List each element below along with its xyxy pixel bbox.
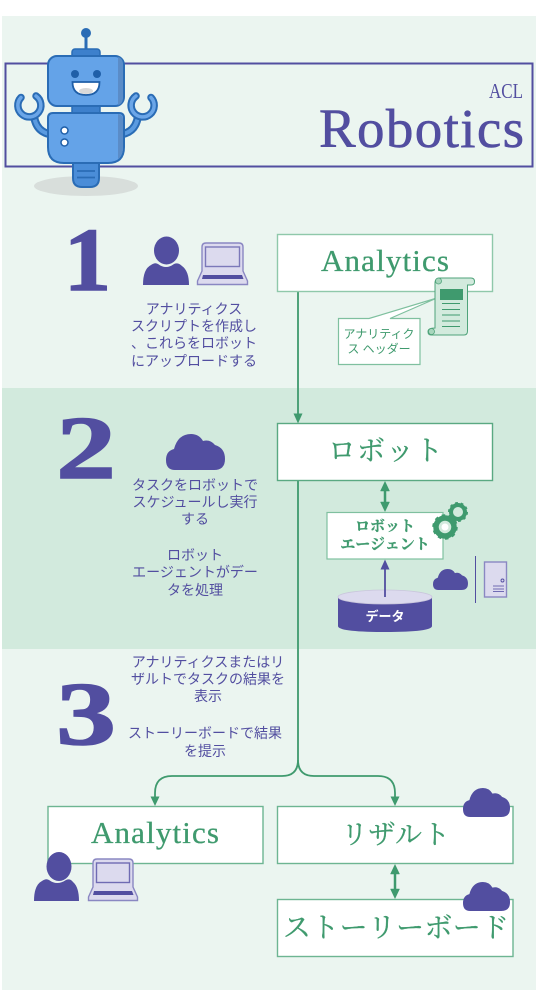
- text: step 1 description: にアップロードする: [131, 353, 257, 369]
- text: step 3 description: ストーリーボードで結果: [128, 725, 282, 741]
- numeral 3: 3: [56, 664, 116, 764]
- icon: robot: [18, 28, 154, 196]
- box: Analytics (step 3): Analytics: [91, 815, 219, 850]
- numeral 2: 2: [56, 398, 116, 498]
- text: step 1 description: [131, 301, 257, 369]
- database: データ: データ: [365, 609, 405, 624]
- text: step 2 description: エージェントがデー: [132, 564, 258, 580]
- text: step 3 description: [128, 654, 285, 759]
- text: step 3 description: を提示: [184, 743, 226, 759]
- callout: analytics header: ス ヘッダー: [347, 341, 411, 356]
- text: step 1 description: スクリプトを作成し: [131, 318, 257, 334]
- box: ロボット: ロボット: [328, 436, 444, 467]
- title: ACL: ACL: [489, 79, 523, 103]
- box: ロボット エージェント: エージェント: [340, 536, 430, 553]
- icon: person (step 3): [34, 852, 79, 901]
- icon: scroll: [428, 278, 474, 335]
- text: step 2 description: する: [181, 511, 209, 527]
- arms: [34, 116, 138, 134]
- text: step 3 description: アナリティクスまたはリ: [132, 654, 284, 670]
- icon: gears: [434, 504, 466, 538]
- connector: analytics to robot: [294, 291, 302, 424]
- numeral 1: 1: [64, 210, 111, 310]
- box: リザルト: [278, 806, 513, 864]
- text: step 2 description: タを処理: [167, 582, 223, 598]
- text: step 3 description: ザルトでタスクの結果を: [131, 671, 285, 687]
- box: Analytics (step 1): [278, 234, 492, 292]
- text: step 1 description: 、これらをロボット: [131, 335, 257, 351]
- icon: cloud (data): [433, 569, 468, 590]
- callout: analytics header: [338, 298, 437, 364]
- icon: person (step 1): [143, 236, 189, 285]
- box: ロボット: [278, 424, 492, 480]
- text: step 3 description: 表示: [194, 688, 222, 704]
- text: step 2 description: [132, 477, 258, 598]
- text: step 2 description: タスクをロボットで: [132, 477, 258, 493]
- box: リザルト: リザルト: [341, 820, 451, 850]
- database: データ: [338, 590, 432, 632]
- header frame: [6, 64, 532, 166]
- head: [48, 56, 124, 106]
- box: ロボット エージェント: [327, 512, 443, 559]
- text: step 2 description: スケジュールし実行: [132, 494, 258, 510]
- icon: cloud (step 2): [166, 434, 225, 470]
- connector: robot to outputs: [150, 481, 400, 806]
- arrow: results and storyboard: [390, 864, 400, 898]
- foot: [73, 160, 99, 187]
- antenna: [81, 28, 91, 38]
- text: step 1 description: アナリティクス: [146, 301, 242, 317]
- text: step 2 description: ロボット: [167, 547, 223, 563]
- icon: cloud (results): [463, 788, 510, 817]
- box: ストーリーボード: [278, 900, 513, 956]
- box: ロボット エージェント: ロボット: [355, 518, 415, 535]
- callout: analytics header: アナリティク: [343, 327, 415, 341]
- icon: server: [484, 562, 506, 597]
- icon: laptop (step 3): [88, 859, 138, 900]
- box: Analytics (step 1): Analytics: [321, 243, 449, 278]
- title: Robotics: Robotics: [319, 98, 524, 159]
- icon: cloud (storyboard): [463, 882, 510, 911]
- arrow: data to agent: [380, 560, 390, 597]
- arrow: robot and agent: [380, 482, 390, 512]
- box: Analytics (step 3): [48, 806, 263, 864]
- icon: laptop (step 1): [198, 243, 248, 284]
- band: step 2 background: [2, 388, 536, 649]
- neck: [72, 105, 100, 114]
- box: ストーリーボード: ストーリーボード: [283, 913, 509, 944]
- divider: [474, 556, 476, 603]
- body: [48, 113, 124, 163]
